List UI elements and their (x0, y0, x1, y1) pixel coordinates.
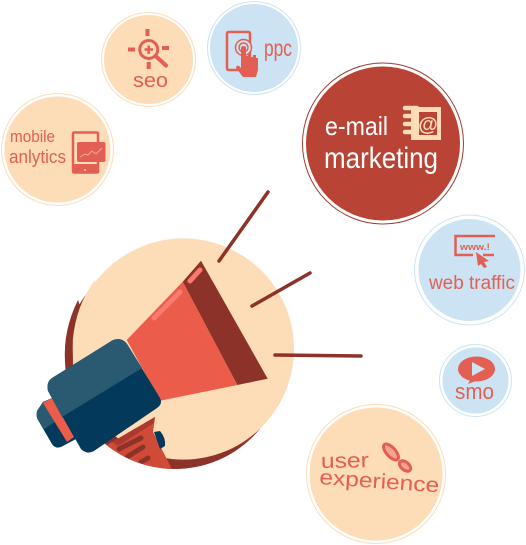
label: mobile analytics: mobile (10, 127, 55, 146)
megaphone handle (107, 417, 172, 469)
label: user experience (319, 449, 440, 497)
label: mobile analytics: anlytics (9, 147, 66, 167)
peach circle (73, 238, 294, 460)
megaphone illustration (37, 192, 361, 475)
user experience badge (306, 404, 446, 544)
label: ppc: ppc (264, 35, 292, 61)
megaphone body (48, 339, 161, 453)
icon: tablet with chart (72, 132, 106, 173)
mobile analytics badge (2, 94, 114, 206)
web traffic badge (414, 215, 524, 325)
icon: address book: @ (418, 114, 438, 136)
icon: magnifier (128, 29, 169, 69)
ppc badge (208, 2, 300, 94)
label: seo: seo (133, 70, 168, 92)
label: e-mail marketing: marketing (324, 142, 438, 175)
megaphone horn (127, 261, 268, 401)
e-mail marketing badge (302, 63, 464, 224)
label: smo: smo (455, 379, 494, 404)
sound rays (219, 192, 361, 356)
icon: play speech bubble (458, 356, 495, 384)
back shadow circle (65, 249, 285, 469)
megaphone rear cap (37, 398, 76, 448)
seo badge (102, 12, 196, 106)
icon: mask (381, 442, 413, 473)
label: user experience: experience (319, 466, 440, 497)
label: mobile analytics (9, 127, 66, 167)
label: web traffic: web traffic (428, 273, 515, 294)
icon: tablet with touching hand (227, 32, 258, 77)
icon: browser window with cursor: www.! (459, 242, 490, 252)
megaphone button (154, 431, 165, 449)
label: e-mail marketing (324, 111, 438, 175)
icon: address book (405, 107, 441, 140)
label: e-mail marketing: e-mail (325, 111, 388, 141)
smo badge (440, 344, 512, 416)
label: user experience: user (321, 449, 369, 473)
